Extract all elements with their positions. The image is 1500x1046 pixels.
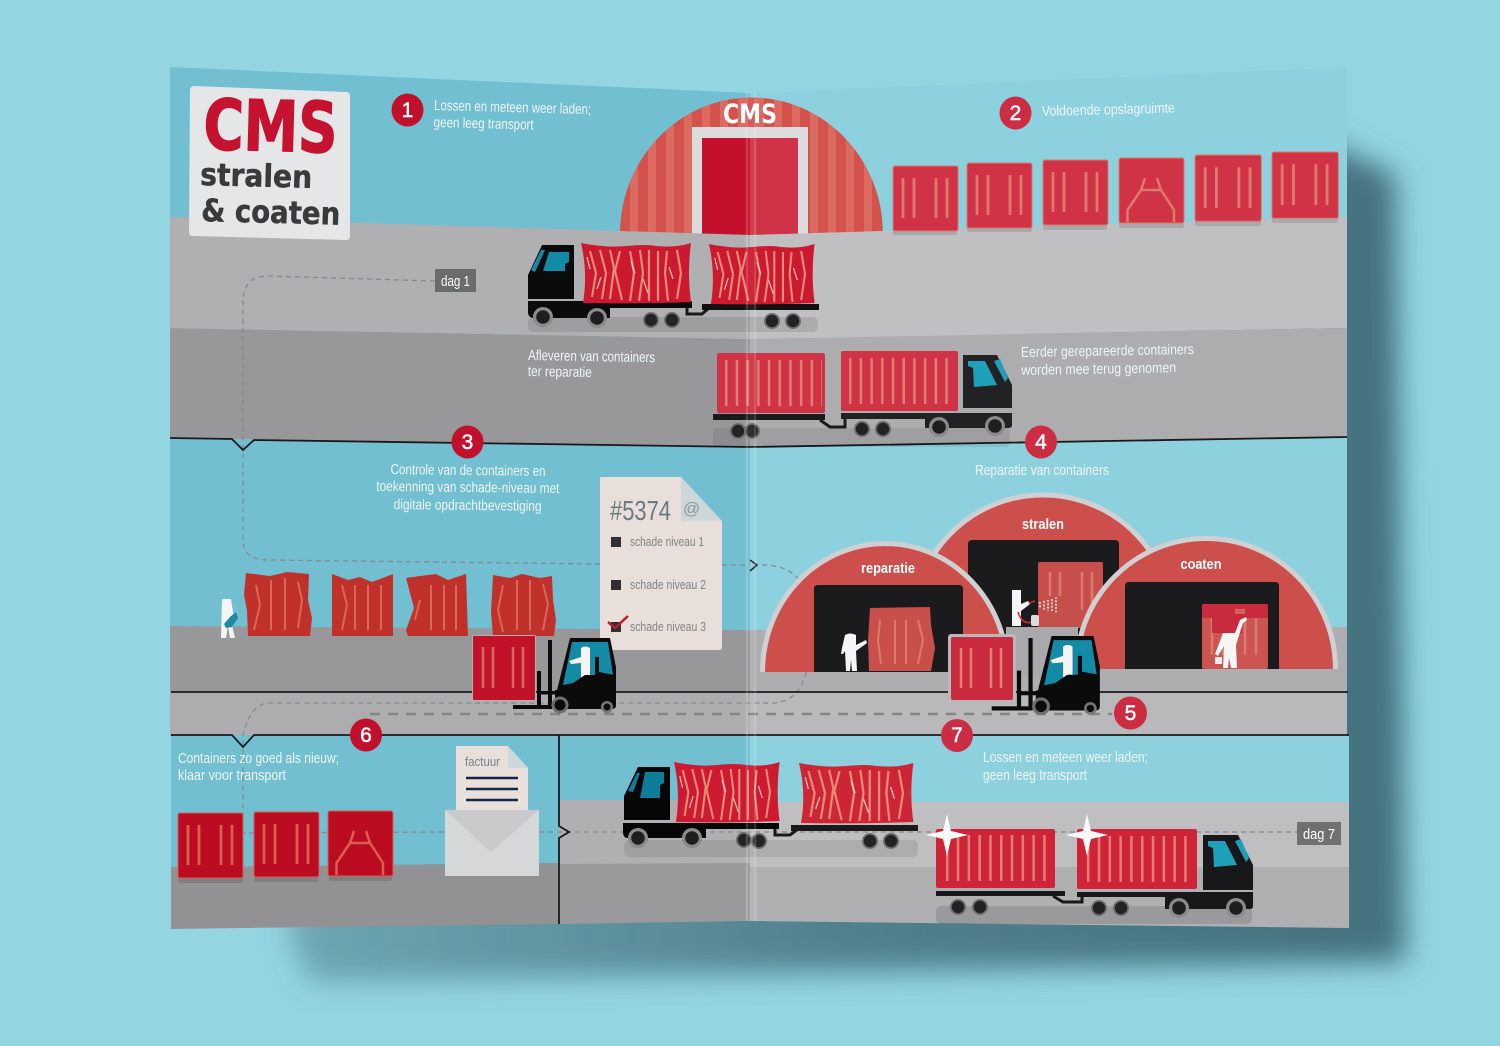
- hangar CMS: [620, 97, 883, 236]
- title CMS: CMS: [203, 84, 339, 170]
- brochure spine highlight: [745, 91, 757, 921]
- lower road right: [750, 328, 1347, 447]
- road top right: [750, 217, 1347, 339]
- step 1 badge: 1: [402, 99, 413, 122]
- step 7 text: Lossen en meteen weer laden;: [983, 750, 1148, 766]
- title card: [189, 84, 350, 240]
- checkbox list: schade niveau 2: [630, 577, 706, 592]
- delivery text: [528, 348, 655, 382]
- pickup text: Eerder gerepareerde containers: [1021, 342, 1194, 361]
- step 1 badge: [392, 94, 424, 126]
- step 6 text: klaar voor transport: [178, 768, 286, 784]
- road section 5 right: [750, 692, 1347, 736]
- road top left: [170, 217, 750, 339]
- damaged containers: [244, 572, 556, 636]
- step 2 badge: [1000, 96, 1032, 130]
- step 1 text: [433, 98, 591, 135]
- pickup text: [1020, 342, 1194, 379]
- hangar reparatie: [762, 544, 1008, 672]
- step 6 badge: [350, 718, 382, 752]
- truck 4 with finished containers: [936, 829, 1253, 924]
- road section 5 left: [170, 692, 750, 736]
- step 6 badge: 6: [360, 724, 372, 747]
- pickup text: worden mee terug genomen: [1020, 360, 1176, 379]
- step 4 badge: [1025, 426, 1057, 458]
- ground patch between hangars: [1006, 627, 1078, 677]
- step 1 text: geen leeg transport: [433, 115, 534, 134]
- panel: sky top left: [170, 67, 750, 236]
- panel: sky top right: [750, 67, 1347, 236]
- panel: section 4 sky: [750, 437, 1347, 631]
- label coaten: coaten: [1180, 556, 1222, 573]
- delivery text: ter reparatie: [528, 364, 592, 381]
- subtitle line 2: & coaten: [201, 193, 341, 233]
- sprayer worker: [1012, 590, 1056, 626]
- brochure shadow: [285, 125, 1406, 982]
- step 3 badge: [452, 426, 484, 458]
- panel: section 6: [171, 735, 559, 929]
- lower road left: [170, 328, 750, 447]
- day 1 label: dag 1: [441, 273, 470, 290]
- invoice label: factuur: [465, 754, 501, 769]
- sparkle icons: [926, 814, 1108, 856]
- truck 3 with damaged containers: [623, 762, 918, 857]
- day 7 label: dag 7: [1303, 826, 1335, 843]
- step 7 text: geen leeg transport: [983, 768, 1087, 784]
- panel: section 7 right: [750, 735, 1349, 928]
- hangar coaten: [1076, 538, 1336, 669]
- subtitle line 1: stralen: [200, 157, 313, 196]
- finished containers: [178, 811, 393, 883]
- step 3 text: Controle van de containers en: [390, 462, 546, 480]
- truck 2 with repaired containers: [713, 351, 1012, 447]
- document: damage report: [600, 477, 722, 650]
- step 5 badge: 5: [1125, 702, 1136, 725]
- storage containers: [893, 152, 1338, 235]
- step 6 text: [178, 751, 339, 784]
- route dashed line: [243, 276, 1297, 833]
- ground left: [170, 626, 750, 692]
- email icon: @: [683, 499, 700, 518]
- step 4 text: Reparatie van containers: [975, 463, 1109, 479]
- step 5 badge: [1114, 696, 1147, 730]
- step 7 badge: [941, 719, 973, 752]
- forklift 1: [472, 635, 616, 714]
- step 6 text: Containers zo goed als nieuw;: [178, 751, 339, 767]
- step 3 text: toekenning van schade-niveau met: [376, 479, 559, 497]
- hangar stralen: [913, 495, 1173, 640]
- checkbox list: [608, 534, 706, 634]
- step 3 text: [376, 462, 560, 515]
- section dividers: [170, 437, 1349, 924]
- label reparatie: reparatie: [861, 560, 915, 577]
- step 7 badge: 7: [951, 724, 963, 747]
- inspection worker: [221, 599, 238, 638]
- panel: section 7 left: [559, 735, 750, 924]
- invoice and envelope: [445, 746, 539, 876]
- road centre dashes: [370, 713, 1112, 715]
- step 3 text: digitale opdrachtbevestiging: [394, 497, 542, 515]
- step 2 text: Voldoende opslagruimte: [1042, 101, 1175, 120]
- step 3 badge: 3: [462, 431, 473, 454]
- label stralen: stralen: [1022, 516, 1064, 533]
- step 4 badge: 4: [1035, 431, 1047, 454]
- truck 1 with damaged containers: [528, 243, 819, 332]
- forklift 2: [948, 634, 1100, 715]
- day 7 label: [1297, 822, 1341, 845]
- order number: #5374: [610, 495, 671, 526]
- step 1 text: Lossen en meteen weer laden;: [434, 98, 591, 118]
- ground right: [750, 627, 1347, 692]
- step 2 badge: 2: [1010, 102, 1021, 125]
- delivery text: Afleveren van containers: [528, 348, 655, 366]
- hangar label: CMS: [723, 99, 777, 130]
- panel: section 3 sky: [170, 438, 750, 631]
- checkbox list: schade niveau 3: [630, 619, 706, 634]
- day 1 label: [435, 269, 476, 292]
- checkbox list: schade niveau 1: [630, 534, 704, 549]
- step 7 text: [983, 750, 1148, 784]
